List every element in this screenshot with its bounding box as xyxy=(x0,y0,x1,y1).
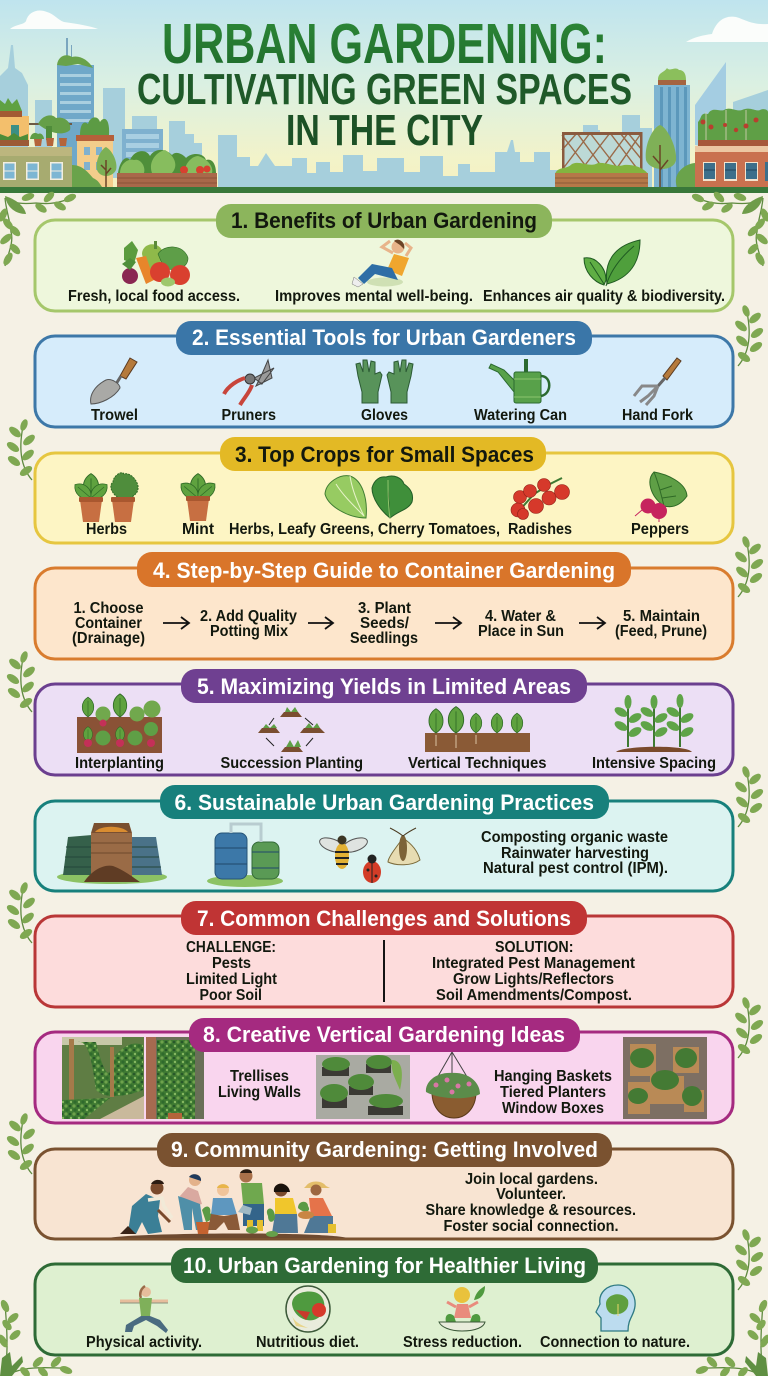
panel 5: yields xyxy=(35,669,733,775)
step 4: Place in Sun xyxy=(478,623,564,640)
ground strip xyxy=(0,187,768,193)
text: peppers: Peppers xyxy=(631,521,689,538)
yellow house with planter xyxy=(76,117,114,187)
icon: gloves xyxy=(356,360,413,403)
title: IN THE CITY xyxy=(286,106,483,155)
text: pruners: Pruners xyxy=(222,407,276,424)
text: involvement: Share knowledge & resources. xyxy=(426,1202,636,1219)
text: stress reduction: Stress reduction. xyxy=(403,1334,522,1351)
photo: trellis garden xyxy=(62,1037,144,1119)
text: hanging baskets: Tiered Planters xyxy=(500,1084,606,1101)
heading 9 xyxy=(157,1133,612,1167)
arrow 1 xyxy=(163,617,189,629)
text: vertical techniques: Vertical Techniques xyxy=(408,755,547,772)
step 2: Potting Mix xyxy=(210,623,288,640)
heading 2: 2. Essential Tools for Urban Gardeners xyxy=(192,325,576,350)
challenge column xyxy=(186,939,278,1004)
panel 3: crops xyxy=(35,437,733,543)
title: CULTIVATING GREEN SPACES xyxy=(137,65,632,114)
icon: hand fork xyxy=(634,358,681,405)
icon: potted herbs xyxy=(71,473,138,522)
photo: wall planters xyxy=(316,1055,410,1119)
text: hanging baskets: Window Boxes xyxy=(502,1100,604,1117)
icon: succession cycle xyxy=(258,707,325,752)
icon: rain barrels xyxy=(207,824,283,887)
text: nutritious diet: Nutritious diet. xyxy=(256,1334,359,1351)
text: air quality: Enhances air quality & biodiversity. xyxy=(483,288,725,305)
text: connection: Connection to nature. xyxy=(540,1334,690,1351)
heading 1 xyxy=(216,204,552,238)
panel 6: sustainability xyxy=(35,785,733,891)
icon: radish bunch xyxy=(635,472,687,522)
challenge column: CHALLENGE: xyxy=(186,939,276,956)
text: involvement xyxy=(426,1171,636,1235)
tree and bush, right xyxy=(646,125,695,187)
icon: stress reduction xyxy=(439,1286,485,1331)
step 3 xyxy=(350,600,418,647)
heading 8: 8. Creative Vertical Gardening Ideas xyxy=(203,1022,565,1047)
step 1 xyxy=(72,600,145,647)
column divider xyxy=(383,940,385,1002)
step 3: Seedlings xyxy=(350,630,418,647)
left glass tower xyxy=(57,38,94,180)
text: intensive spacing: Intensive Spacing xyxy=(592,755,716,772)
heading 3 xyxy=(220,437,546,471)
heading 7 xyxy=(181,901,587,935)
heading 3: 3. Top Crops for Small Spaces xyxy=(235,442,534,467)
text: physical activity: Physical activity. xyxy=(86,1334,202,1351)
icon: compost bins xyxy=(57,823,167,884)
text: leafy greens list: Herbs, Leafy Greens, Cherry Tomatoes, xyxy=(229,521,500,538)
icon: lettuce and spinach xyxy=(325,476,413,518)
heading 4: 4. Step-by-Step Guide to Container Gardening xyxy=(153,558,615,583)
text: interplanting: Interplanting xyxy=(75,755,164,772)
title xyxy=(137,12,632,155)
solution column: SOLUTION: xyxy=(495,939,574,956)
text: hanging baskets: Hanging Baskets xyxy=(494,1068,612,1085)
icon: trowel xyxy=(91,358,137,404)
text: trellises: Living Walls xyxy=(218,1084,301,1101)
step 1: (Drainage) xyxy=(72,630,145,647)
red brick building with tomatoes xyxy=(695,109,768,187)
text: involvement: Volunteer. xyxy=(496,1186,566,1203)
icon: vegetables xyxy=(122,241,190,286)
step 3: 3. Plant xyxy=(358,600,412,617)
heading 7: 7. Common Challenges and Solutions xyxy=(197,906,571,931)
panel 2: tools xyxy=(35,321,733,427)
icon: intensive spacing xyxy=(613,694,695,752)
lattice trellis with raised bed xyxy=(555,132,648,187)
text: herbs: Herbs xyxy=(86,521,127,538)
text: practices: Rainwater harvesting xyxy=(501,845,649,862)
heading 1: 1. Benefits of Urban Gardening xyxy=(231,208,537,233)
text: hanging baskets xyxy=(494,1068,612,1117)
challenge column: Pests xyxy=(212,955,251,972)
step 4: 4. Water & xyxy=(485,608,556,625)
arrow 4 xyxy=(579,617,605,629)
icon: interplanting xyxy=(77,694,162,753)
text: fresh food: Fresh, local food access. xyxy=(68,288,240,305)
step 5 xyxy=(615,608,707,640)
challenge column: Poor Soil xyxy=(200,987,262,1004)
illustration: gardeners xyxy=(108,1169,348,1238)
icon: head with leaf xyxy=(596,1285,635,1331)
heading 10 xyxy=(171,1248,598,1283)
step 2: 2. Add Quality xyxy=(200,608,297,625)
solution column: Grow Lights/Reflectors xyxy=(453,971,614,988)
text: involvement: Foster social connection. xyxy=(444,1218,618,1235)
text: mint: Mint xyxy=(182,521,215,538)
panel 1: benefits xyxy=(35,204,733,311)
step 1: Container xyxy=(75,615,142,632)
heading 5 xyxy=(181,669,587,703)
heading 4 xyxy=(137,552,631,587)
text: trowel: Trowel xyxy=(91,407,138,424)
right tower with planter xyxy=(654,62,768,187)
icon: cherry tomatoes xyxy=(511,478,570,520)
text: practices: Composting organic waste xyxy=(481,829,668,846)
raised bed with greens, left xyxy=(117,150,217,187)
solution column: Soil Amendments/Compost. xyxy=(436,987,632,1004)
step 5: (Feed, Prune) xyxy=(615,623,707,640)
blue office block xyxy=(122,129,163,187)
heading 6: 6. Sustainable Urban Gardening Practices xyxy=(174,790,594,815)
arrow 3 xyxy=(435,617,461,629)
title: URBAN GARDENING: xyxy=(162,12,607,76)
step 4 xyxy=(478,608,564,640)
photo: tiered crates xyxy=(623,1037,707,1119)
distant skyline xyxy=(0,45,768,187)
text: hand fork: Hand Fork xyxy=(622,407,693,424)
text: practices: Natural pest control (IPM). xyxy=(483,860,668,877)
text: watering can: Watering Can xyxy=(474,407,567,424)
text: succession planting: Succession Planting xyxy=(220,755,363,772)
icon: watering can xyxy=(489,359,549,403)
clouds xyxy=(10,10,768,42)
panel 4: steps xyxy=(35,552,733,659)
icon: potted mint xyxy=(177,474,219,521)
photo: living wall xyxy=(146,1037,204,1119)
icon: vertical techniques xyxy=(425,707,530,752)
solution column xyxy=(432,939,636,1004)
olive rooftop building xyxy=(0,147,72,187)
text: radishes: Radishes xyxy=(508,521,572,538)
step 5: 5. Maintain xyxy=(623,608,700,625)
heading 10: 10. Urban Gardening for Healthier Living xyxy=(183,1253,586,1278)
icon: beneficial insects xyxy=(318,828,420,883)
heading 2 xyxy=(176,321,592,355)
panel 9: community xyxy=(35,1133,733,1239)
bush and tree, left xyxy=(72,147,116,187)
panel 8: vertical ideas xyxy=(35,1018,733,1123)
icon: pruners xyxy=(224,360,274,405)
solution column: Integrated Pest Management xyxy=(432,955,636,972)
challenge column: Limited Light xyxy=(186,971,278,988)
icon: hanging basket xyxy=(426,1052,480,1118)
arrow 2 xyxy=(308,617,333,629)
step 1: 1. Choose xyxy=(74,600,144,617)
panel 10: healthier living xyxy=(35,1248,733,1355)
panel 7: challenges xyxy=(35,901,733,1007)
icon: relaxing person xyxy=(352,240,411,287)
heading 6 xyxy=(160,785,609,819)
text: involvement: Join local gardens. xyxy=(465,1171,598,1188)
text: mental wellbeing: Improves mental well-being. xyxy=(275,288,473,305)
icon: salad bowl xyxy=(286,1286,330,1332)
icon: green leaves xyxy=(584,240,640,286)
text: practices xyxy=(481,829,668,877)
icon: yoga xyxy=(120,1286,168,1333)
step 3: Seeds/ xyxy=(360,615,410,632)
text: trellises: Trellises xyxy=(230,1068,289,1085)
left yellow rooftop block xyxy=(0,98,72,146)
step 2 xyxy=(200,608,297,640)
text: gloves: Gloves xyxy=(361,407,408,424)
header banner: city skyline xyxy=(0,0,768,193)
heading 9: 9. Community Gardening: Getting Involved xyxy=(171,1137,598,1162)
heading 5: 5. Maximizing Yields in Limited Areas xyxy=(197,674,571,699)
text: trellises xyxy=(218,1068,301,1101)
